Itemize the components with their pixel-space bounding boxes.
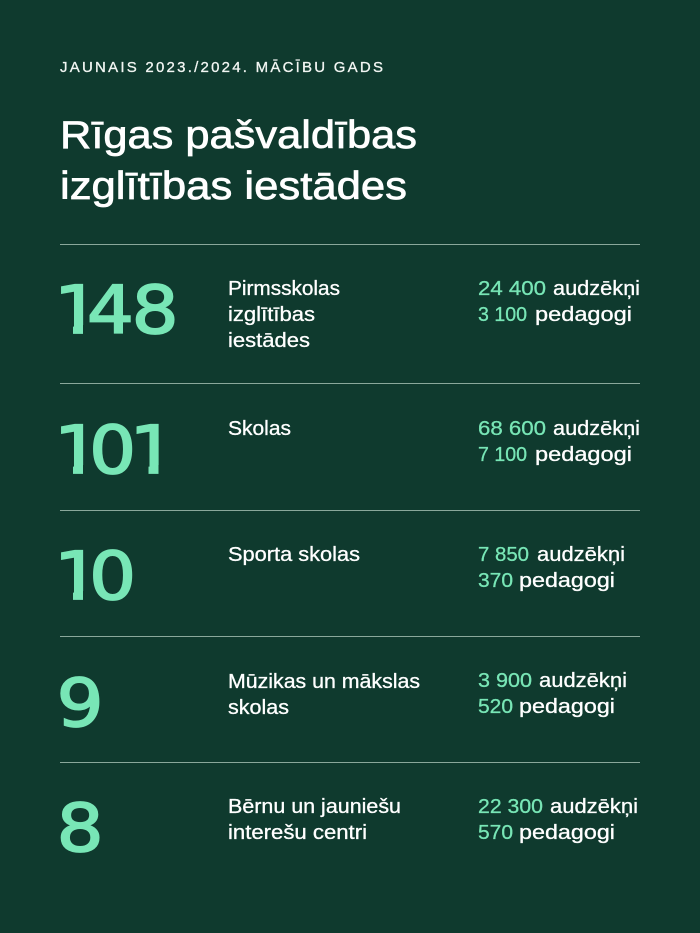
eyebrow heading: JAUNAIS 2023./2024. MĀCĪBU GADS (60, 59, 383, 76)
label: preschools: Pirmsskolas (228, 278, 340, 300)
row: children and youth centres (57, 790, 638, 867)
stats: sports schools (478, 544, 625, 592)
row: schools (52, 412, 640, 489)
label: preschools: iestādes (228, 330, 310, 352)
label: music and art schools (228, 671, 420, 719)
stats: preschools: pedagogi (535, 304, 632, 326)
stats: music and art schools: audzēkņi (539, 670, 627, 692)
label: preschools (228, 278, 340, 352)
label: schools: Skolas (228, 418, 291, 440)
stats: schools: audzēkņi (553, 418, 640, 440)
title (60, 114, 417, 208)
number: 148: 148 (54, 272, 179, 349)
stats: children and youth centres: 22 300 (478, 796, 543, 818)
stats: sports schools: 7 850 (478, 544, 529, 566)
stats: music and art schools (478, 670, 627, 718)
stats: sports schools: audzēkņi (537, 544, 625, 566)
label: sports schools: Sporta skolas (228, 544, 360, 566)
label: children and youth centres: Bērnu un jauniešu (228, 796, 401, 818)
stats: schools: pedagogi (535, 444, 632, 466)
stats: preschools: 24 400 (478, 278, 546, 300)
stats: preschools: 3 100 (478, 304, 527, 326)
stats: preschools: audzēkņi (553, 278, 640, 300)
label: music and art schools: skolas (228, 697, 289, 719)
stats: children and youth centres (478, 796, 638, 844)
number: 101: 101 (54, 412, 176, 489)
number: 9: 9 (57, 665, 104, 742)
row: preschools (52, 272, 640, 352)
stats: children and youth centres: pedagogi (519, 822, 615, 844)
stats: music and art schools: 3 900 (478, 670, 532, 692)
title: Rīgas pašvaldības (60, 114, 417, 157)
stats: schools (478, 418, 640, 466)
stats: sports schools: pedagogi (519, 570, 615, 592)
stats: schools: 68 600 (478, 418, 546, 440)
label: preschools: izglītības (228, 304, 315, 326)
label: music and art schools: Mūzikas un mākslas (228, 671, 420, 693)
title: izglītības iestādes (60, 165, 407, 208)
stats: music and art schools: pedagogi (519, 696, 615, 718)
row: music and art schools (57, 665, 627, 742)
stats: schools: 7 100 (478, 444, 527, 466)
number: 10: 10 (54, 538, 136, 615)
stats: children and youth centres: audzēkņi (550, 796, 638, 818)
number: 8: 8 (57, 790, 104, 867)
stats: music and art schools: 520 (478, 696, 513, 718)
row: sports schools (52, 538, 625, 615)
stats: sports schools: 370 (478, 570, 513, 592)
label: children and youth centres (228, 796, 401, 844)
label: children and youth centres: interešu centri (228, 822, 367, 844)
stats: children and youth centres: 570 (478, 822, 513, 844)
stats: preschools (478, 278, 640, 326)
